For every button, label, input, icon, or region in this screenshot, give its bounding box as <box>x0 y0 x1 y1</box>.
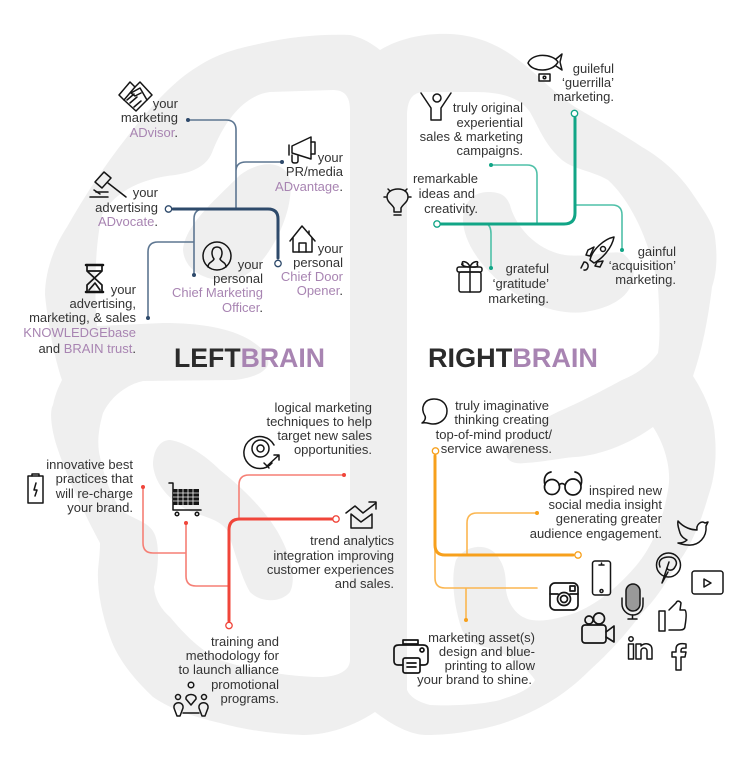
text: your advertising marketing and sales knowledgebase and brain trust: your <box>111 282 137 297</box>
text: truly imaginative thinking: truly imaginative <box>455 398 549 413</box>
icon: facebook <box>672 644 686 670</box>
text: your advertising advocate <box>95 185 159 229</box>
text: guileful guerrilla marketing <box>553 61 614 104</box>
text: grateful gratitude marketing <box>488 261 549 306</box>
icon: trend chart <box>346 502 376 528</box>
text: trend analytics integration: and sales. <box>335 576 394 591</box>
text: training and methodology: training and <box>211 634 279 649</box>
icon: gavel <box>90 172 126 197</box>
icon: video play <box>692 571 723 594</box>
icon: light bulb <box>384 189 411 215</box>
text: logical marketing techniques: techniques to help <box>266 414 372 429</box>
heading: right brain: RIGHTBRAIN <box>428 343 598 373</box>
text: marketing assets design: printing to allow <box>445 658 536 673</box>
text: training and methodology <box>179 634 280 706</box>
text: your personal chief door opener <box>281 241 344 298</box>
icon: person with raised arms <box>421 93 451 120</box>
text: inspired new social media insight: inspired new <box>589 483 663 498</box>
text: your advertising advocate: advertising <box>95 200 158 215</box>
icon: battery <box>28 474 43 503</box>
text: truly original experiential campaigns: truly original <box>453 100 523 115</box>
icon: pinterest <box>656 553 680 583</box>
text: marketing assets design: marketing asset(s) <box>428 630 535 645</box>
text: remarkable ideas creativity: remarkable <box>413 171 478 186</box>
text: your advertising marketing and sales knowledgebase and brain trust: KNOWLEDGEbase <box>23 325 136 340</box>
text: your personal chief marketing officer <box>172 257 264 315</box>
icon: video camera <box>582 613 614 643</box>
text: truly original experiential campaigns <box>420 100 523 158</box>
panel: left brain top <box>23 82 344 373</box>
text: your personal chief door opener: Opener. <box>297 283 343 298</box>
text: trend analytics integration: trend analytics <box>310 533 394 548</box>
text: trend analytics integration: integration improving <box>273 548 394 563</box>
text: trend analytics integration: customer experiences <box>267 562 394 577</box>
icon: smartphone <box>592 561 610 595</box>
icon: twitter <box>678 521 708 545</box>
text: your personal chief marketing officer: your <box>238 257 264 272</box>
text: logical marketing techniques: target new sales <box>277 428 372 443</box>
text: your advertising marketing and sales knowledgebase and brain trust: marketing, & sales <box>29 310 136 325</box>
text: your personal chief door opener: Chief Door <box>281 269 344 284</box>
text: your PR/media advantage: ADvantage. <box>275 179 343 194</box>
text: inspired new social media insight: generating greater <box>556 511 663 526</box>
text: your marketing advisor <box>121 96 179 140</box>
text: truly original experiential campaigns: experiential <box>456 115 523 130</box>
text: truly original experiential campaigns: campaigns. <box>457 143 523 158</box>
icon: megaphone <box>289 137 315 163</box>
icon: hourglass <box>86 265 103 292</box>
panel: right brain bottom <box>394 398 723 687</box>
text: logical marketing techniques <box>266 400 372 457</box>
text: innovative best practices: will re-charge <box>55 486 133 501</box>
connector lines: teal <box>434 110 624 270</box>
text: gainful acquisition marketing: ‘acquisition’ <box>609 258 676 273</box>
text: trend analytics integration <box>267 533 394 591</box>
text: truly imaginative thinking <box>436 398 552 456</box>
icon: blimp <box>528 54 562 81</box>
text: inspired new social media insight <box>530 483 663 541</box>
text: gainful acquisition marketing: marketing. <box>615 272 676 287</box>
text: your marketing advisor: your <box>153 96 179 111</box>
text: your PR/media advantage: PR/media <box>286 164 344 179</box>
icon: shopping cart <box>169 483 201 516</box>
text: marketing assets design: your brand to shine. <box>417 672 532 687</box>
text: grateful gratitude marketing: grateful <box>506 261 549 276</box>
text: marketing assets design: design and blue- <box>439 644 535 659</box>
text: your PR/media advantage <box>275 150 344 194</box>
text: training and methodology: to launch alliance <box>179 662 279 677</box>
text: your personal chief marketing officer: personal <box>213 271 263 286</box>
text: truly original experiential campaigns: sales & marketing <box>420 129 523 144</box>
text: your personal chief door opener: your <box>318 241 344 256</box>
text: your marketing advisor: ADvisor. <box>130 125 178 140</box>
text: innovative best practices: your brand. <box>67 500 133 515</box>
icon: target <box>244 437 279 469</box>
icon: person in circle <box>203 242 231 270</box>
text: your advertising advocate: your <box>133 185 159 200</box>
text: training and methodology: methodology for <box>186 648 280 663</box>
icon: speech bubble <box>422 399 447 424</box>
text: your PR/media advantage: your <box>318 150 344 165</box>
text: innovative best practices <box>46 457 133 515</box>
text: inspired new social media insight: audience engagement. <box>530 526 662 541</box>
panel: left brain bottom <box>28 400 394 716</box>
text: your advertising advocate: ADvocate. <box>98 214 158 229</box>
text: truly imaginative thinking: thinking creating <box>454 412 549 427</box>
icon: linkedin <box>628 637 652 659</box>
text: guileful guerrilla marketing: ‘guerrilla’ <box>562 75 614 90</box>
text: your personal chief marketing officer: Chief Marketing <box>172 285 263 300</box>
icon: thumbs up <box>659 601 686 631</box>
icon: rocket <box>581 237 614 270</box>
connector lines: red <box>141 473 346 629</box>
icon: glasses <box>544 472 582 495</box>
connector lines: orange <box>432 448 581 622</box>
icon: instagram <box>550 583 578 610</box>
text: gainful acquisition marketing: gainful <box>638 244 676 259</box>
text: training and methodology: programs. <box>220 691 279 706</box>
icon: handshake <box>119 82 152 111</box>
text: your personal chief door opener: personal <box>293 255 343 270</box>
connector lines: navy <box>146 118 284 320</box>
text: guileful guerrilla marketing: marketing. <box>553 89 614 104</box>
text: gainful acquisition marketing <box>609 244 676 287</box>
text: your advertising marketing and sales knowledgebase and brain trust <box>23 282 137 356</box>
text: logical marketing techniques: logical marketing <box>274 400 372 415</box>
text: marketing assets design <box>417 630 536 687</box>
heading: left brain: LEFTBRAIN <box>174 343 325 373</box>
panel: right brain top <box>384 54 676 373</box>
text: your personal chief marketing officer: Officer. <box>222 300 263 315</box>
text: training and methodology: promotional <box>211 677 279 692</box>
text: grateful gratitude marketing: ‘gratitude’ <box>493 276 549 291</box>
icon: microphone <box>622 584 643 619</box>
text: truly imaginative thinking: service awareness. <box>441 441 552 456</box>
icon: house <box>290 226 315 252</box>
icon: printer <box>394 640 428 673</box>
text: remarkable ideas creativity: creativity. <box>424 201 478 216</box>
text: remarkable ideas creativity <box>413 171 478 216</box>
text: truly imaginative thinking: top-of-mind product/ <box>436 427 552 442</box>
text: inspired new social media insight: social media insight <box>549 497 662 512</box>
text: grateful gratitude marketing: marketing. <box>488 291 549 306</box>
text: your advertising marketing and sales knowledgebase and brain trust: advertising, <box>70 296 136 311</box>
text: innovative best practices: practices that <box>56 471 133 486</box>
text: innovative best practices: innovative best <box>46 457 133 472</box>
icon: gift <box>457 262 482 292</box>
icon: group of people <box>174 682 208 716</box>
text: your advertising marketing and sales knowledgebase and brain trust: and BRAIN trust. <box>38 341 136 356</box>
text: guileful guerrilla marketing: guileful <box>573 61 614 76</box>
text: your marketing advisor: marketing <box>121 110 178 125</box>
text: logical marketing techniques: opportunities. <box>294 442 372 457</box>
text: remarkable ideas creativity: ideas and <box>419 186 475 201</box>
